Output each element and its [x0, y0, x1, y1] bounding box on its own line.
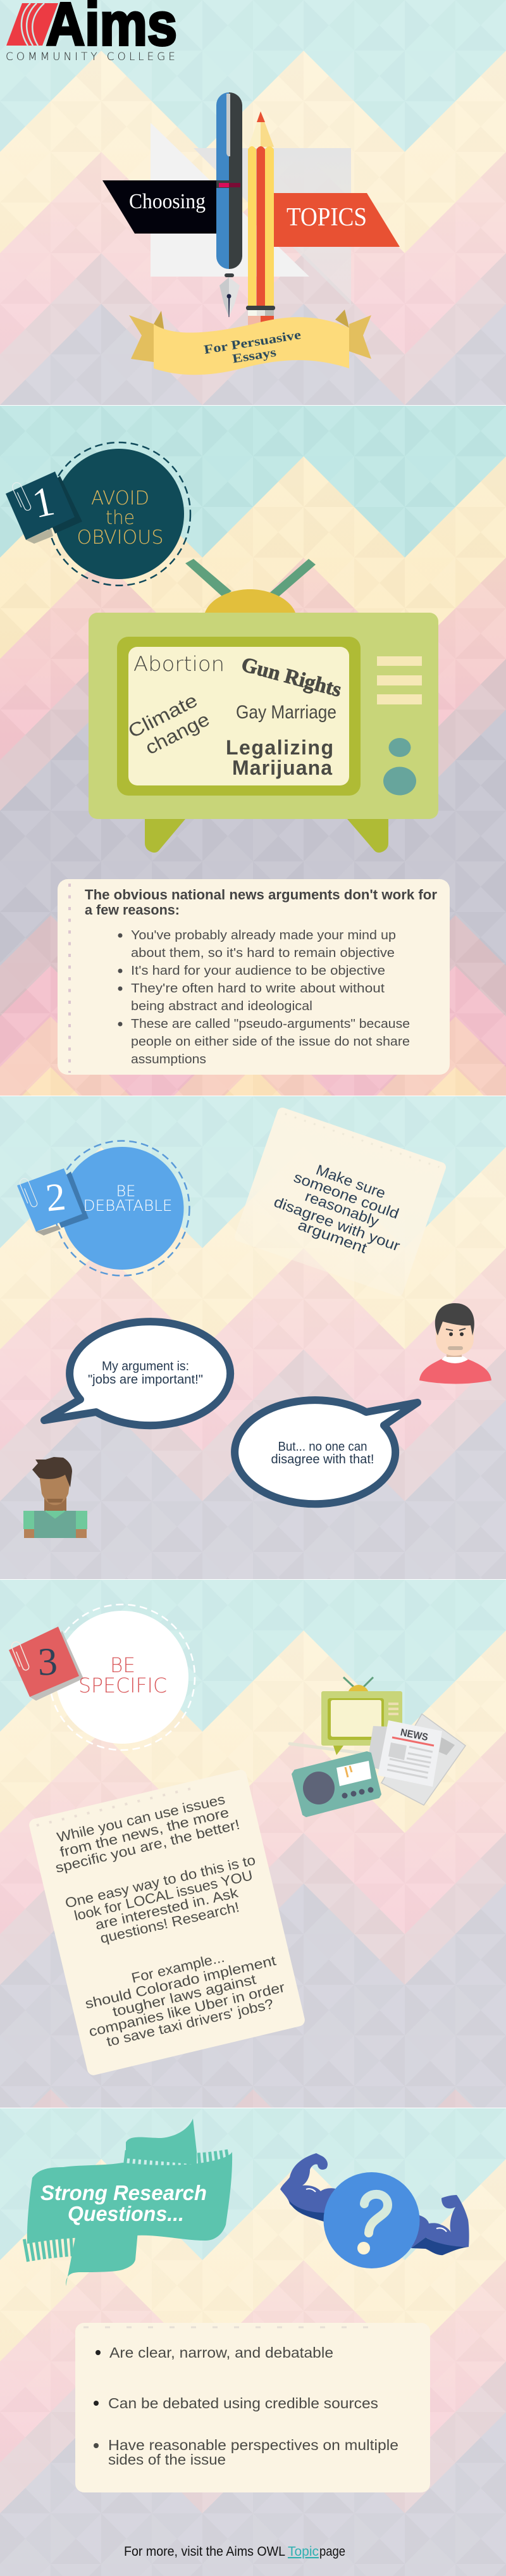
logo: Aims Community College [6, 0, 177, 63]
footer: more information line: Topic [288, 2544, 319, 2559]
heading badge 3: be specific: 3 [37, 1640, 58, 1684]
screen words [125, 652, 344, 779]
heading badge 2: be debatable: DEBATABLE [83, 1197, 172, 1215]
left arm [280, 2153, 335, 2222]
heading badge 1: avoid the obvious: the [106, 507, 135, 529]
speech bubble: no one can disagree: But... no one can [278, 1440, 367, 1454]
icon: radio [292, 1752, 381, 1816]
bullet list: It's hard for your audience to be objective [131, 964, 385, 978]
note: make sure someone could disagree [233, 1106, 447, 1297]
note: be specific advice: are interested in. Ask [94, 1884, 240, 1933]
note: be specific advice: look for LOCAL issues YOU [73, 1867, 254, 1923]
footer: more information line: page [319, 2544, 345, 2559]
note: make sure someone could disagree: someone could [292, 1168, 401, 1222]
note: be specific advice: While you can use issues [55, 1791, 226, 1845]
icon: fountain pen [216, 92, 242, 317]
speech bubble: my argument [44, 1322, 230, 1425]
icon: newspaper [367, 1714, 466, 1805]
bullet list: about them, so it's hard to remain objective [131, 946, 395, 960]
screen words: Climate [125, 690, 201, 742]
ribbon: For Persuasive Essays: Essays [231, 346, 278, 366]
icon: man in red shirt [419, 1303, 491, 1384]
ribbon: strong research questions: Questions... [68, 2202, 184, 2225]
bullet list: assumptions [131, 1053, 206, 1066]
right arm [411, 2195, 469, 2255]
screen words: Gun Rights [239, 653, 344, 702]
heading badge 2: be debatable: BE [116, 1182, 135, 1200]
heading badge 2: be debatable: 2 [44, 1175, 68, 1220]
knobs [383, 738, 416, 795]
legs [145, 819, 388, 853]
panel: qualities of strong research questions: Are clear, narrow, and debatable [109, 2344, 333, 2361]
speech bubble: my argument: My argument is: [102, 1360, 189, 1373]
background: section 4 [0, 1580, 506, 2108]
logo: Aims Community College: COMMUNITY COLLEGE [6, 51, 175, 63]
heading badge 3: be specific: BE [110, 1653, 135, 1677]
screen words: Abortion [133, 652, 225, 676]
paper shapes behind the pen [151, 123, 351, 305]
note: be specific advice: For example... [130, 1949, 226, 1986]
note: be specific advice: to save taxi drivers' jobs? [105, 1996, 275, 2049]
note: be specific advice: tougher laws against [111, 1971, 257, 2020]
illustration: tv, radio and newspaper [290, 1677, 466, 1816]
speech bubble: no one can disagree [235, 1400, 417, 1504]
panel: why national news arguments fail [58, 879, 450, 1075]
icon: newspaper: NEWS [400, 1727, 429, 1743]
icon: flexing question mark [280, 2153, 469, 2268]
banner: Choosing [102, 180, 216, 234]
ribbon: strong research questions: Strong Research [40, 2181, 207, 2204]
background: section 3 [0, 1096, 506, 1579]
antennas [185, 559, 316, 597]
speaker bars [377, 656, 422, 704]
screen words: Marijuana [232, 756, 332, 779]
note: be specific advice [28, 1768, 306, 2077]
illustration: television with topic words [89, 559, 438, 853]
bullet list: people on either side of the issue do not share [131, 1035, 410, 1049]
icon: mini tv [290, 1677, 402, 1755]
ribbon: For Persuasive Essays [129, 309, 371, 375]
bullet list: These are called "pseudo-arguments" because [131, 1017, 410, 1031]
banner: Choosing: Choosing [129, 190, 206, 213]
hero illustration: pen, pencil and title banners [102, 92, 400, 375]
note: be specific advice: One easy way to do this is to [63, 1852, 257, 1911]
bullet list [118, 928, 410, 1066]
panel heading: a few reasons: [85, 902, 180, 918]
speech bubble: no one can disagree: disagree with that! [271, 1453, 374, 1466]
note: make sure someone could disagree: disagree with your [272, 1193, 402, 1254]
icon: man in green shirt [23, 1457, 87, 1538]
note: make sure someone could disagree: argument [296, 1216, 369, 1256]
screen words: Gay Marriage [236, 702, 336, 723]
heading badge 3: be specific [9, 1604, 195, 1750]
ribbon: For Persuasive Essays: For Persuasive [203, 328, 302, 357]
icon: pencil [246, 111, 275, 326]
panel: qualities of strong research questions: sides of the issue [108, 2451, 226, 2468]
screen words: Legalizing [226, 736, 333, 759]
ribbon: strong research questions [25, 2118, 232, 2286]
heading badge 1: avoid the obvious: OBVIOUS [77, 527, 163, 549]
footer: more information line: For more, visit the Aims OWL [124, 2544, 285, 2559]
panel: qualities of strong research questions [75, 2323, 430, 2492]
panel heading [85, 887, 437, 918]
note: make sure someone could disagree: reasonably [303, 1187, 381, 1230]
note: be specific advice: companies like Uber in order [87, 1979, 287, 2040]
heading badge 1: avoid the obvious: AVOID [91, 487, 149, 510]
speech bubble: my argument: "jobs are important!" [88, 1373, 203, 1387]
panel: qualities of strong research questions: Can be debated using credible sources [108, 2395, 378, 2411]
note: be specific advice: from the news, the more [58, 1804, 230, 1860]
heading badge 2: be debatable [17, 1141, 190, 1276]
panel heading: The obvious national news arguments don't work for [85, 887, 437, 903]
heading badge 1: avoid the obvious: 1 [28, 478, 58, 527]
note: be specific advice: questions! Research! [99, 1899, 241, 1946]
heading badge 1: avoid the obvious [6, 442, 190, 585]
note: be specific advice: should Colorado implement [83, 1953, 278, 2012]
bullet list: They're often hard to write about without [131, 982, 385, 996]
screen words: change [142, 709, 213, 759]
bullet list: You've probably already made your mind up [131, 928, 396, 942]
banner: TOPICS [274, 193, 400, 247]
bullet list: being abstract and ideological [131, 999, 312, 1013]
heading badge 3: be specific: SPECIFIC [78, 1673, 167, 1698]
note: make sure someone could disagree: Make sure [314, 1161, 388, 1201]
note: be specific advice: specific you are, the better! [54, 1816, 242, 1876]
background: section 1 [0, 0, 506, 405]
panel: qualities of strong research questions: Have reasonable perspectives on multiple [108, 2437, 398, 2453]
background: section 2 [0, 406, 506, 1096]
section divider lines [0, 405, 506, 2108]
background: section 5 [0, 2108, 506, 2576]
banner: TOPICS: TOPICS [287, 202, 367, 231]
